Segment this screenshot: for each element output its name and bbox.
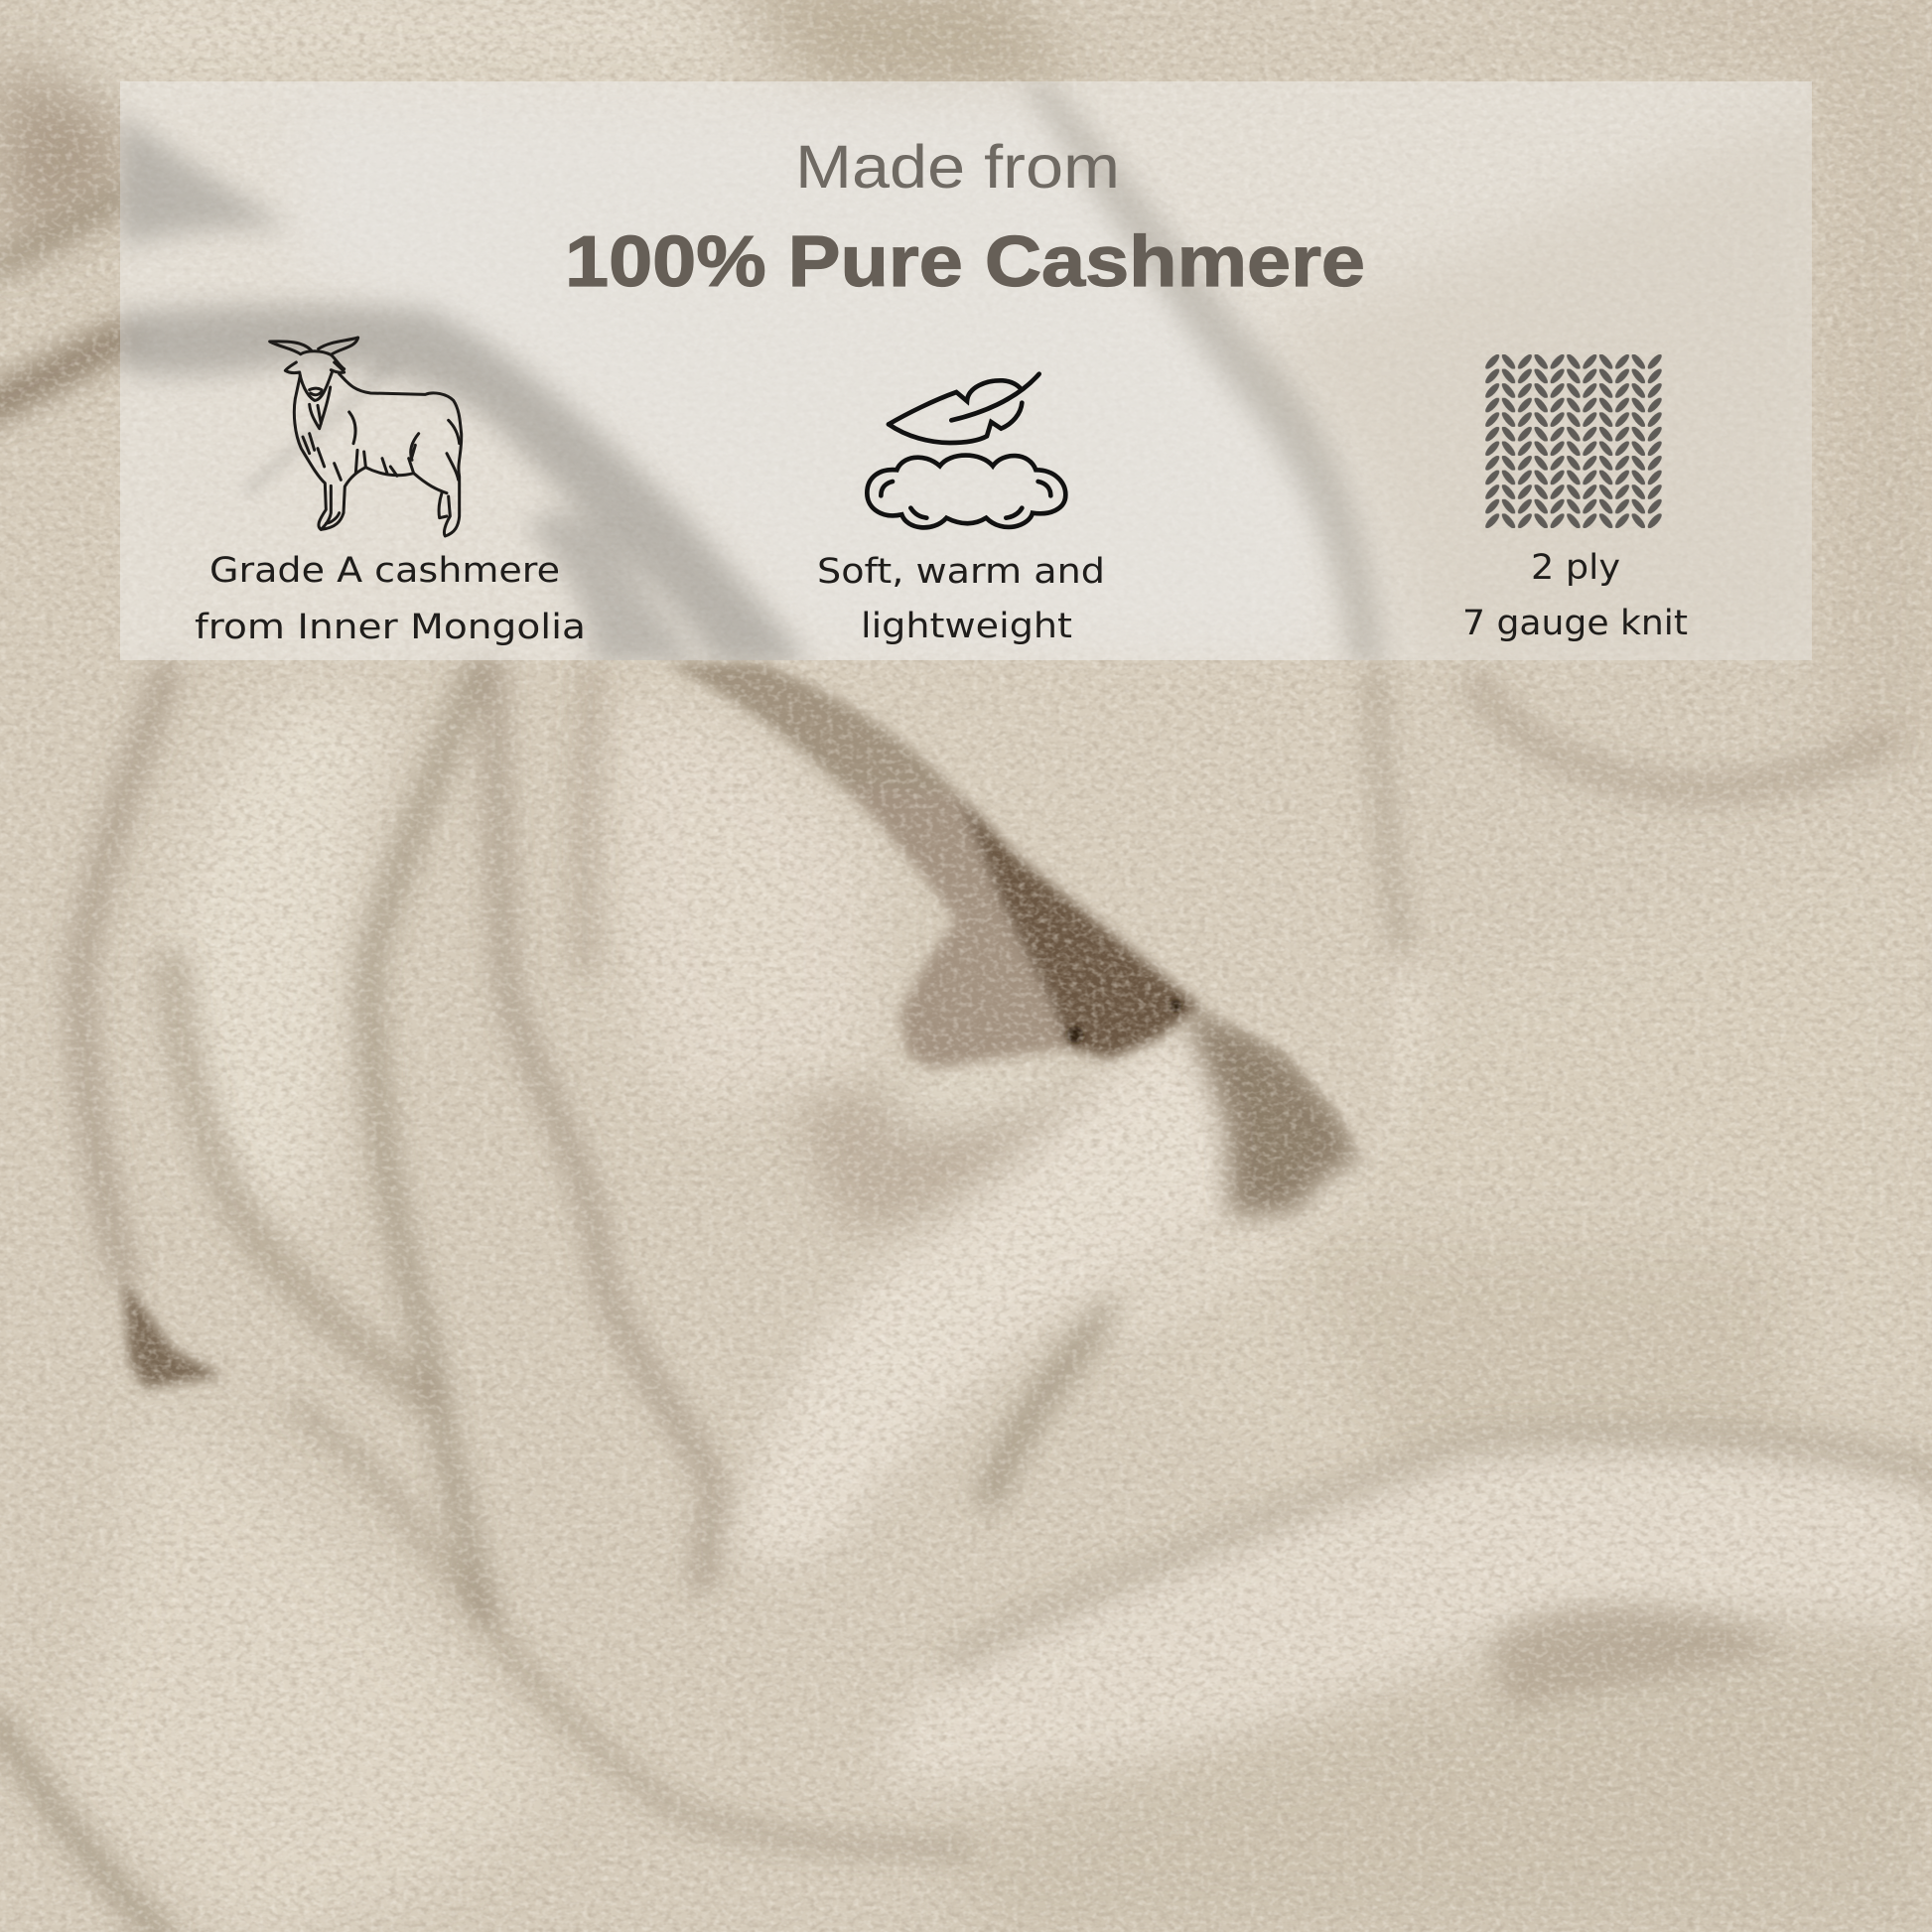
- dark pocket lower left: [123, 1279, 223, 1388]
- label: Grade A cashmere: Grade A cashmere: [209, 551, 560, 591]
- icon: goat: [270, 338, 462, 536]
- icon: knit stitches: [1484, 354, 1663, 528]
- icon: feather over cloud: [867, 374, 1065, 527]
- label: Soft, warm and lightweight: lightweight: [861, 607, 1072, 646]
- label: Soft, warm and lightweight: [817, 552, 1105, 646]
- label: Grade A cashmere: [195, 551, 586, 647]
- label: 2 ply 7 gauge knit: 7 gauge knit: [1462, 604, 1688, 643]
- right seam of upper fold: [1374, 663, 1400, 953]
- deep shadow band and hollow: [665, 663, 1199, 1068]
- label: Soft, warm and lightweight: Soft, warm and: [817, 552, 1105, 592]
- heading: Made from: Made from: [795, 133, 1120, 201]
- upper fold above the hollow: [755, 663, 1392, 1160]
- light tube fold: [735, 973, 1932, 1787]
- label: 2 ply 7 gauge knit: [1462, 548, 1688, 643]
- heading: 100% Pure Cashmere: 100% Pure Cashmere: [565, 222, 1365, 302]
- label: Grade A cashmere: from Inner Mongolia: [195, 608, 586, 647]
- panel shading of the cloth underneath: [120, 81, 1827, 675]
- label: 2 ply 7 gauge knit: 2 ply: [1531, 548, 1620, 588]
- panel: translucent white header: [120, 81, 1827, 675]
